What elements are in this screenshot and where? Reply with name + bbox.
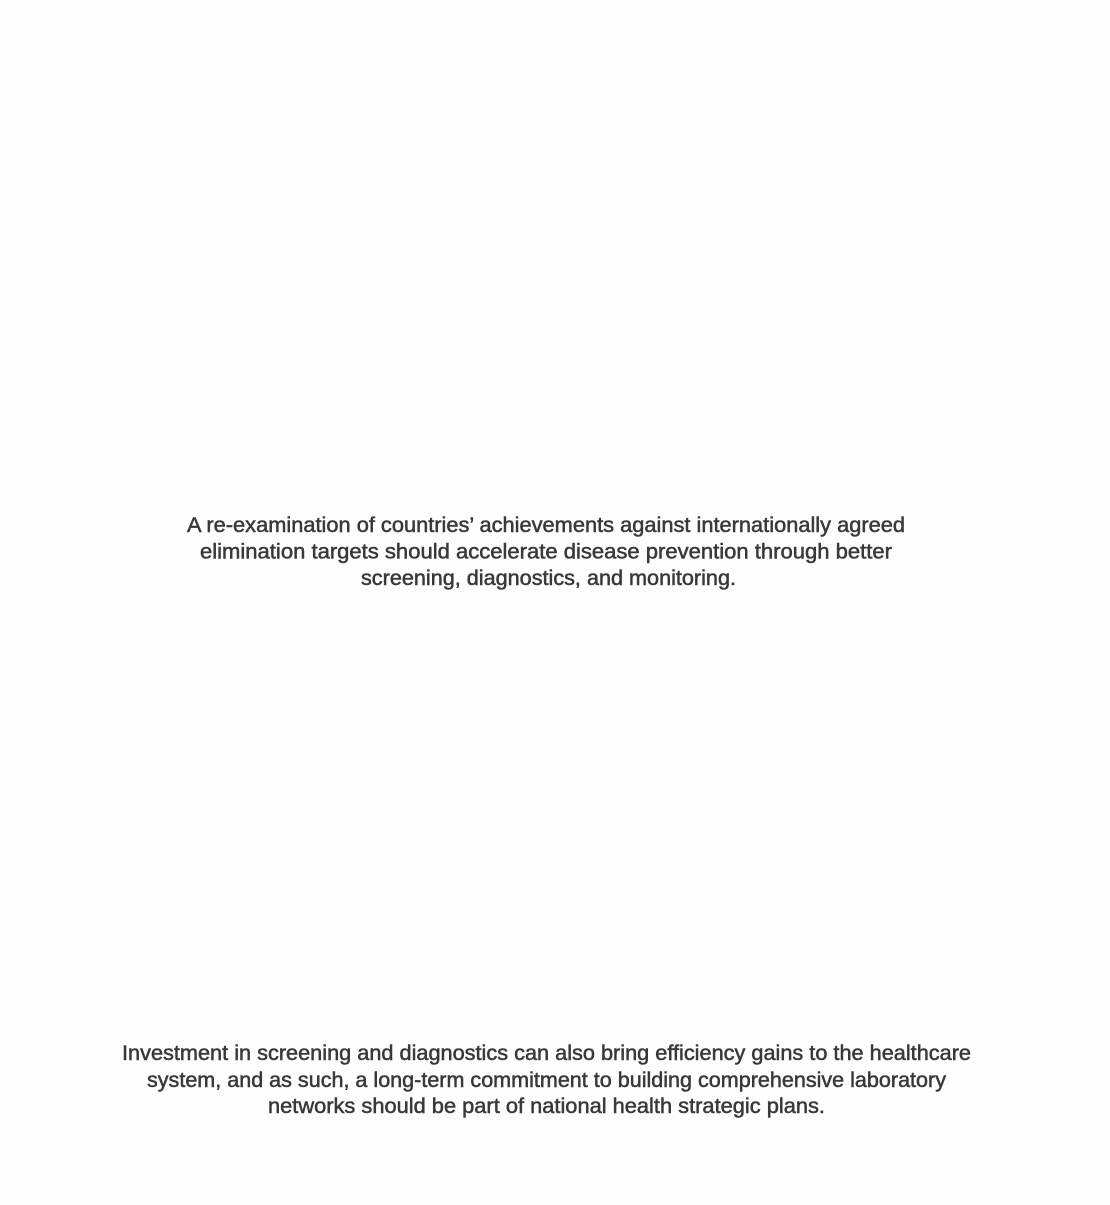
text block: investment in screening and diagnostics: networks should be part of national health strategic plans. (268, 1095, 825, 1118)
text block: investment in screening and diagnostics: system, and as such, a long-term commitment to building comprehensive laboratory (147, 1069, 946, 1092)
text block: re-examination of elimination targets: screening, diagnostics, and monitoring. (361, 567, 736, 590)
text block: investment in screening and diagnostics (122, 1042, 971, 1118)
text block: re-examination of elimination targets: A re-examination of countries’ achievements against internationally agreed (187, 514, 905, 537)
text block: re-examination of elimination targets: elimination targets should accelerate disease prevention through better (200, 540, 892, 564)
text block: re-examination of elimination targets (187, 514, 905, 590)
text block: investment in screening and diagnostics: Investment in screening and diagnostics can also bring efficiency gains to the healthcare (122, 1042, 971, 1065)
